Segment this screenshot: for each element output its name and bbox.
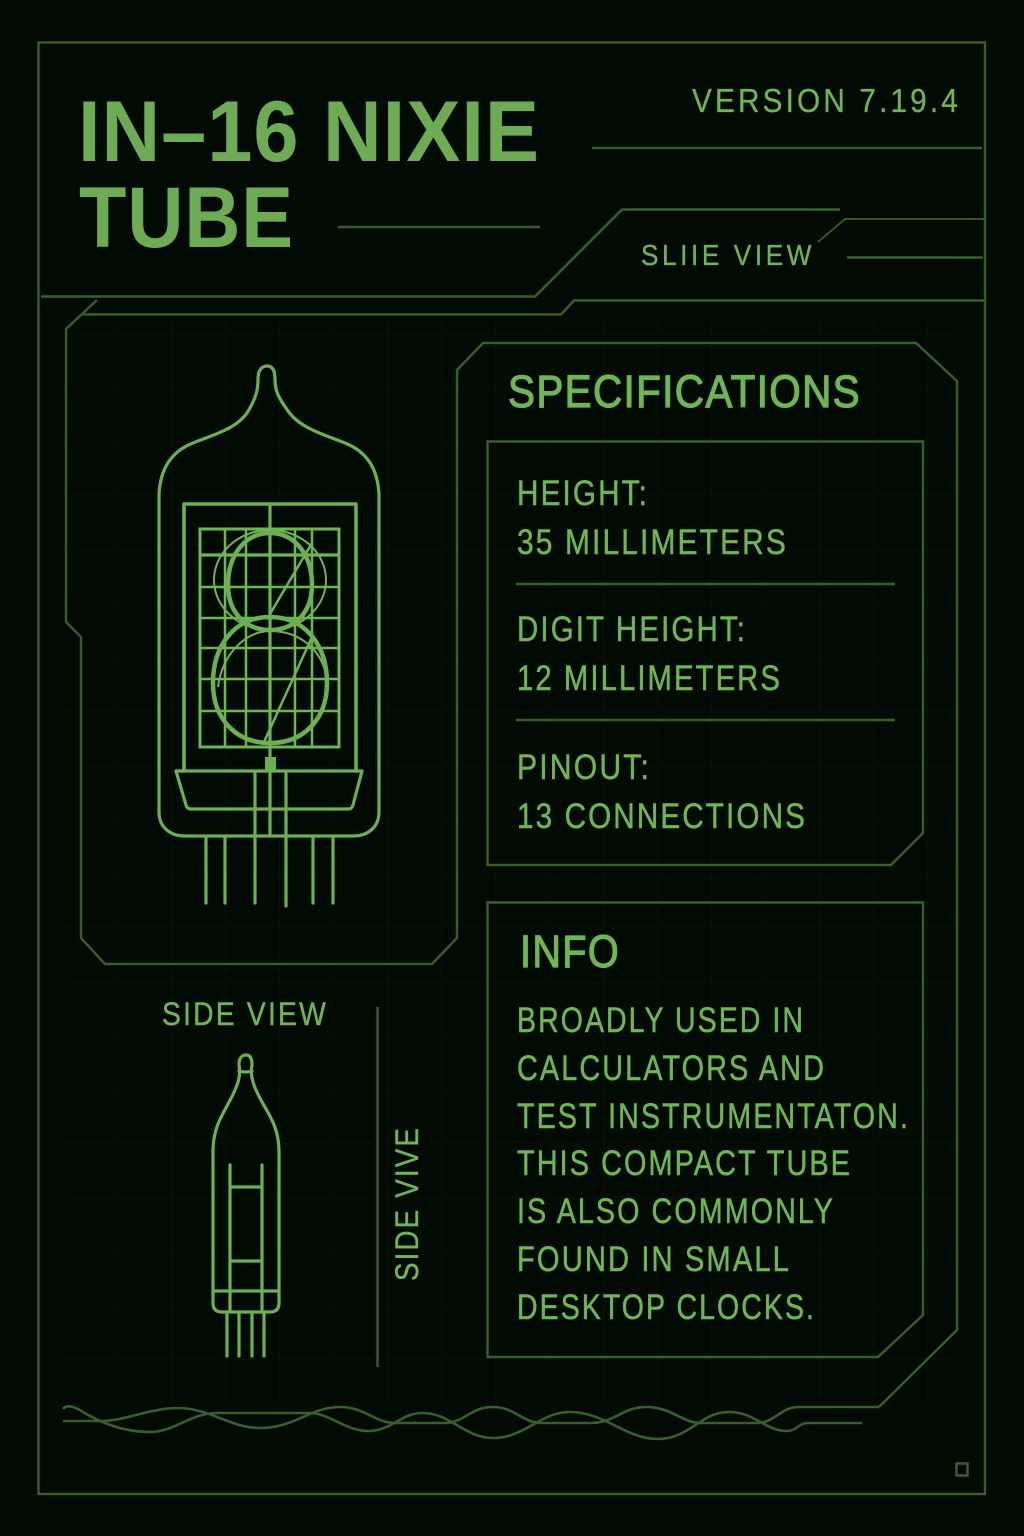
panel: main tube frame	[66, 300, 985, 1407]
title	[78, 84, 540, 266]
spec: digit height	[517, 610, 782, 698]
panel: info	[488, 902, 923, 1357]
title: TUBE	[79, 170, 294, 266]
decorative signal waves	[63, 1406, 879, 1439]
info body text: CALCULATORS AND	[517, 1049, 826, 1088]
heading: specifications: SPECIFICATIONS	[508, 366, 861, 417]
spec: pinout: PINOUT:	[517, 748, 651, 787]
spec: height	[517, 474, 788, 562]
info body text: DESKTOP CLOCKS.	[517, 1288, 816, 1327]
title: IN–16 NIXIE	[78, 84, 540, 180]
spec: digit height: DIGIT HEIGHT:	[517, 610, 747, 649]
spec: height: HEIGHT:	[517, 474, 649, 513]
spec: pinout: 13 CONNECTIONS	[517, 797, 807, 836]
info body text: THIS COMPACT TUBE	[517, 1144, 852, 1183]
spec: pinout	[517, 748, 807, 836]
spec: digit height: 12 MILLIMETERS	[517, 659, 782, 698]
panel: specifications	[488, 366, 923, 865]
heading: info: INFO	[520, 926, 620, 977]
rotated side label: SIDE VIVE	[389, 1126, 425, 1281]
vertical divider	[376, 1007, 379, 1367]
side view label: SIDE VIEW	[162, 996, 328, 1032]
header circuit lines	[41, 148, 985, 296]
info body text: FOUND IN SMALL	[517, 1240, 791, 1279]
corner marker	[956, 1464, 968, 1476]
info body text: BROADLY USED IN	[517, 1001, 805, 1040]
slide view label: SLIIE VIEW	[641, 240, 815, 272]
icon: front view nixie tube	[159, 366, 379, 906]
info body text: TEST INSTRUMENTATON.	[517, 1097, 910, 1136]
version label: VERSION 7.19.4	[692, 82, 961, 119]
info body text: IS ALSO COMMONLY	[517, 1192, 835, 1231]
spec: height: 35 MILLIMETERS	[517, 523, 788, 562]
info body text	[517, 1001, 910, 1327]
icon: side view tube	[213, 1055, 279, 1356]
